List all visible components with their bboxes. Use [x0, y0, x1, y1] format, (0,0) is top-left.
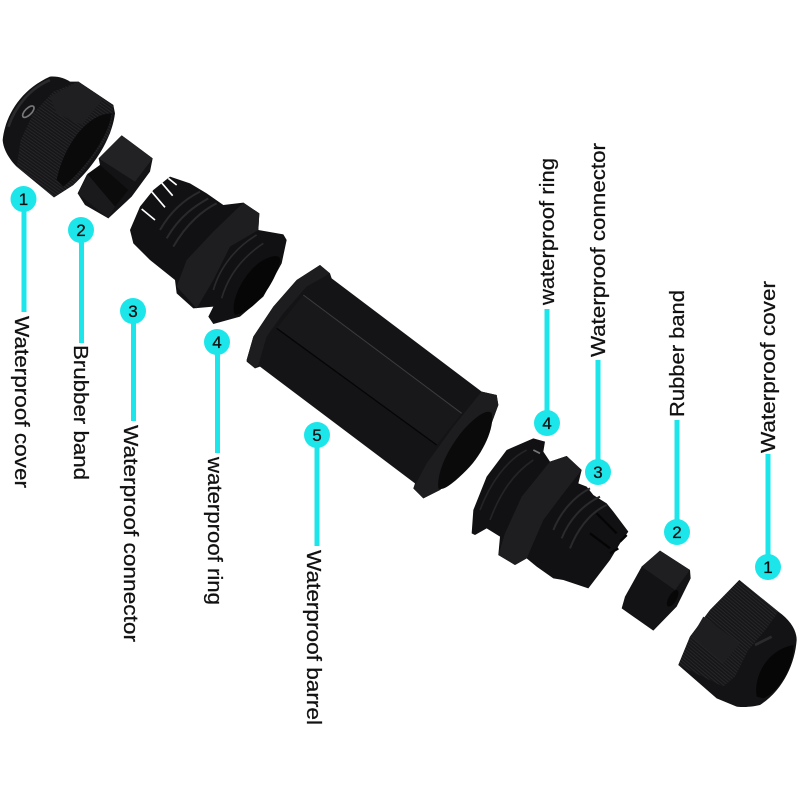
- callout 3: waterproof connector, right: Waterproof connector: [588, 143, 610, 357]
- part: right waterproof cover: [678, 580, 797, 707]
- callout 3: waterproof connector, left: Waterproof connector: [119, 425, 141, 642]
- callout 5: waterproof barrel: 5: [312, 426, 322, 445]
- callout 1: waterproof cover, right: 1: [763, 558, 773, 577]
- callout 1: waterproof cover, left: 1: [19, 190, 28, 209]
- callout 4: waterproof ring, right: [534, 158, 560, 436]
- callout 4: waterproof ring, right: 4: [542, 414, 552, 433]
- callout 2: rubber band, left: 2: [76, 221, 86, 240]
- part: waterproof barrel: [247, 265, 498, 498]
- callout 4: waterproof ring, right: waterproof ring: [537, 158, 559, 306]
- part: right rubber band: [622, 551, 691, 631]
- callout 2: rubber band, right: [664, 290, 690, 545]
- callout 3: waterproof connector, left: 3: [128, 302, 138, 321]
- callout 4: waterproof ring, left: 4: [212, 333, 222, 352]
- part: right waterproof connector: [472, 438, 628, 588]
- callout 1: waterproof cover, left: Waterproof cover: [10, 316, 32, 488]
- callout 2: rubber band, left: [68, 217, 94, 480]
- callout 1: waterproof cover, right: [755, 281, 781, 580]
- callout 4: waterproof ring, left: waterproof ring: [203, 456, 225, 605]
- callout 3: waterproof connector, right: 3: [593, 463, 603, 482]
- part: left rubber band: [78, 135, 153, 218]
- callout 4: waterproof ring, left: [203, 329, 230, 605]
- callout 1: waterproof cover, right: Waterproof cover: [758, 281, 780, 453]
- callout 5: waterproof barrel: Waterproof barrel: [302, 550, 324, 725]
- callout 3: waterproof connector, right: [585, 143, 611, 485]
- callout 2: rubber band, right: Rubber band: [667, 290, 689, 417]
- callout 1: waterproof cover, left: [10, 186, 36, 488]
- callout 2: rubber band, left: Brubber band: [69, 345, 91, 480]
- callout 5: waterproof barrel: [302, 422, 330, 725]
- part: left waterproof cover: [3, 77, 115, 197]
- callout 3: waterproof connector, left: [119, 298, 146, 642]
- callout 2: rubber band, right: 2: [672, 523, 682, 542]
- part: left waterproof connector: [130, 177, 287, 324]
